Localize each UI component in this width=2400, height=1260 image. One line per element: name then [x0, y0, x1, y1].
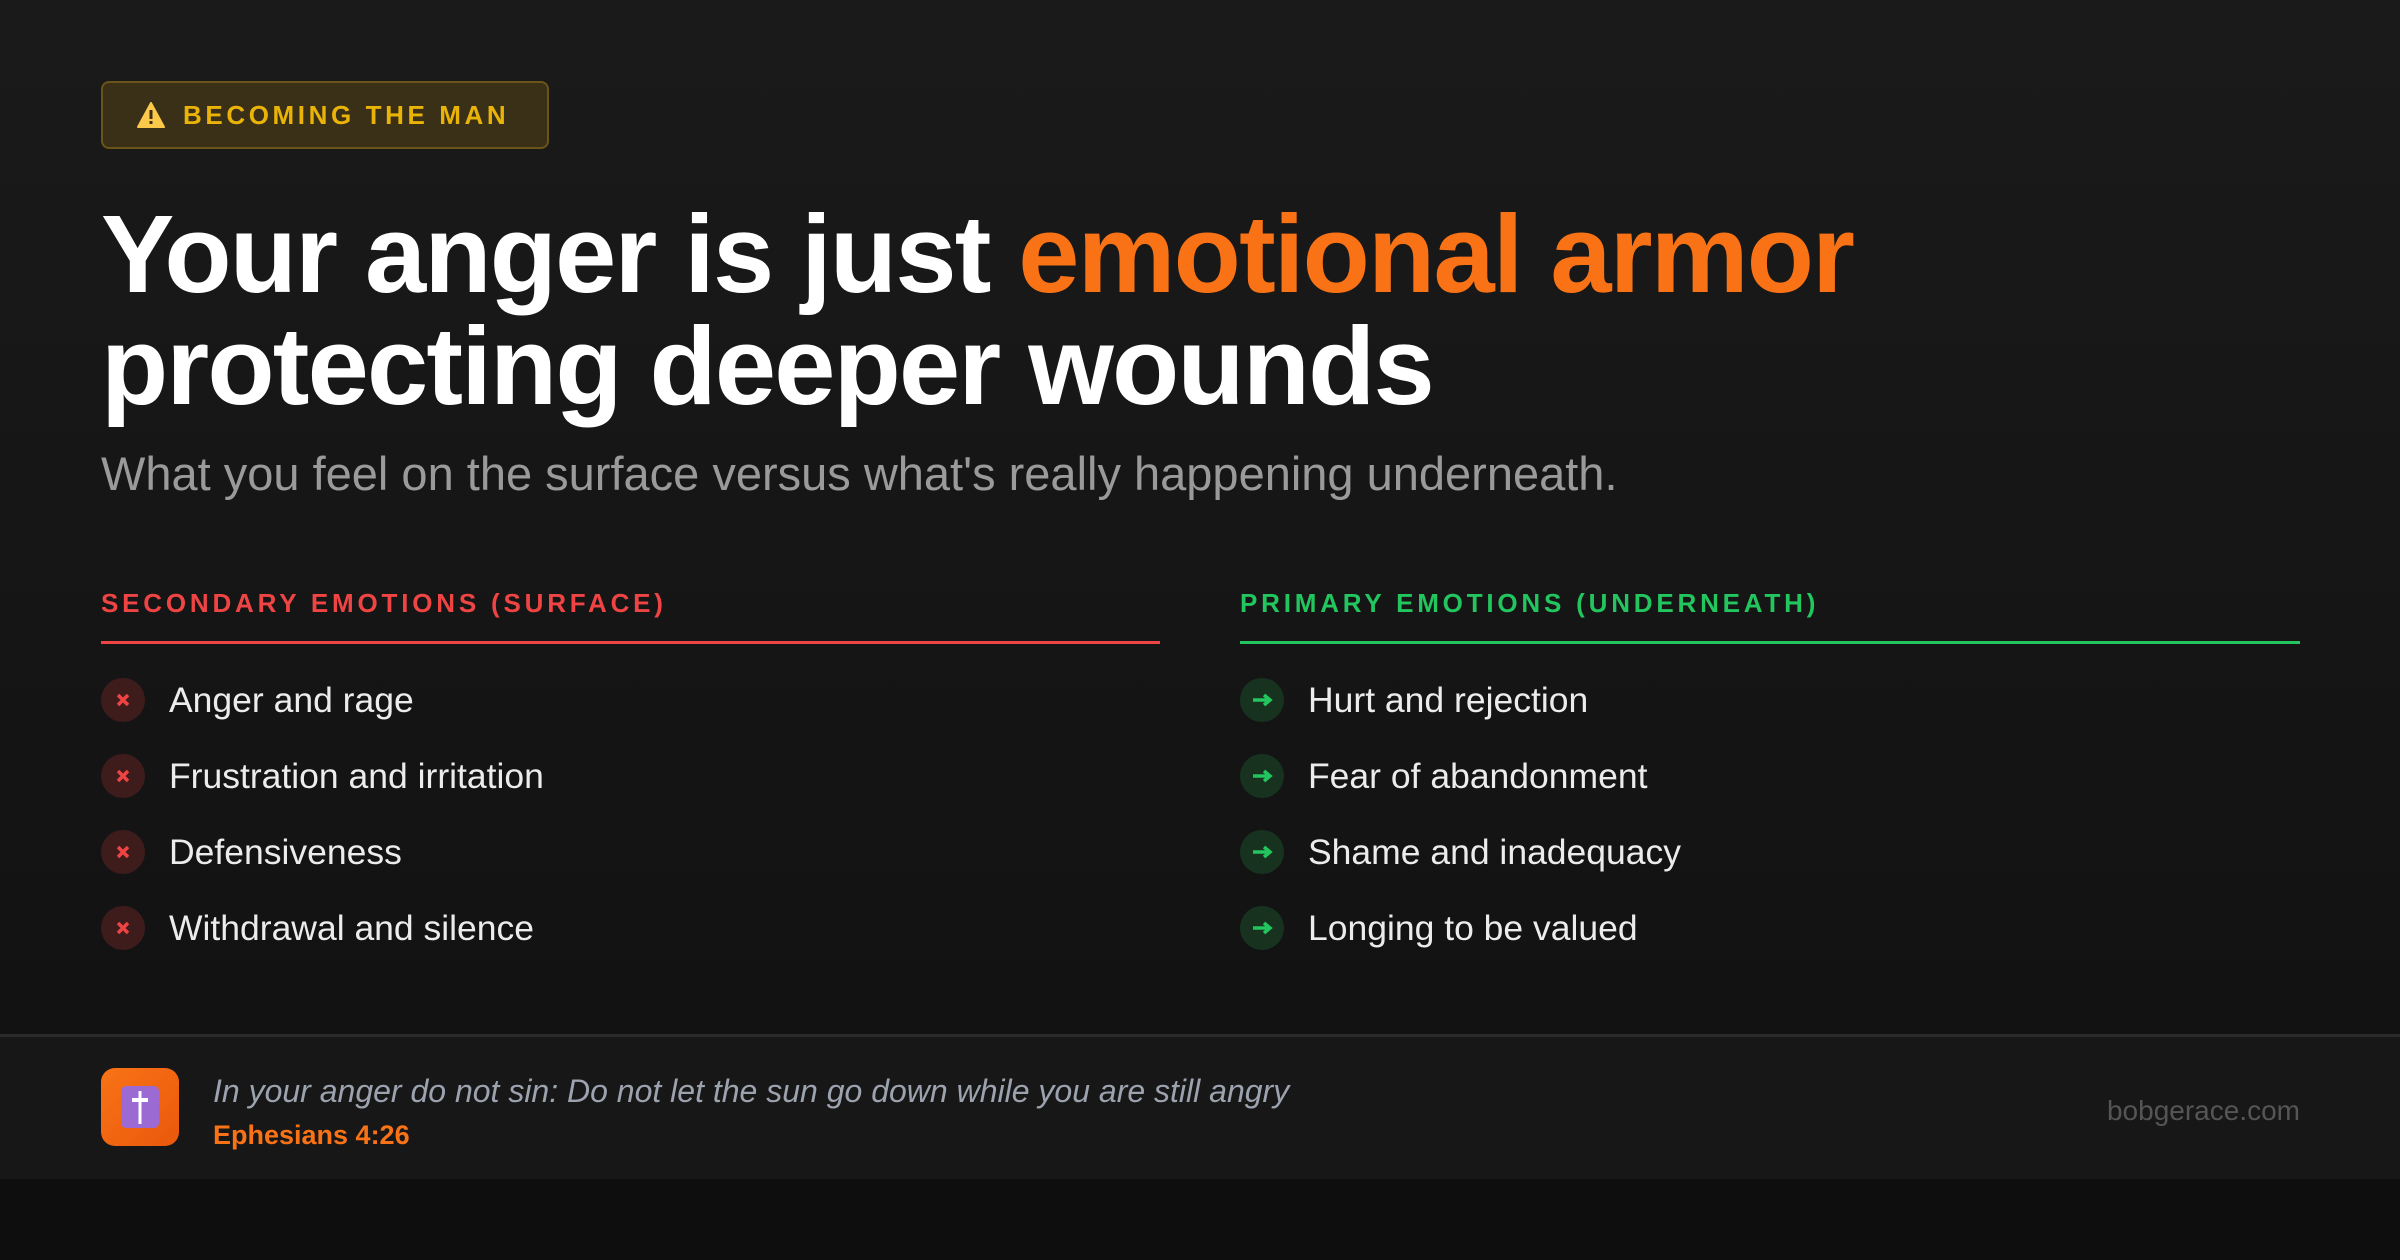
list: underlying emotions: Longing to be valued — [1308, 908, 1638, 948]
list: surface emotions — [101, 678, 544, 950]
list: underlying emotions: Hurt and rejection — [1308, 680, 1588, 720]
title — [101, 193, 1854, 428]
heading: secondary: SECONDARY EMOTIONS (SURFACE) — [101, 588, 667, 618]
heading: primary: PRIMARY EMOTIONS (UNDERNEATH) — [1240, 588, 1819, 618]
list: surface emotions: Frustration and irritation — [169, 756, 544, 796]
icon: cross — [101, 1068, 179, 1146]
title: protecting deeper wounds — [101, 305, 1433, 428]
list: surface emotions: Withdrawal and silence — [169, 908, 534, 948]
list: underlying emotions — [1240, 678, 1681, 950]
heading: secondary — [101, 584, 1160, 644]
badge: BECOMING THE MAN — [183, 100, 509, 130]
site url: bobgerace.com — [2107, 1095, 2300, 1126]
list: underlying emotions: Shame and inadequacy — [1308, 832, 1681, 872]
list: surface emotions: Defensiveness — [169, 832, 402, 872]
list: underlying emotions: Fear of abandonment — [1308, 756, 1647, 796]
badge — [101, 81, 549, 149]
panel: secondary emotions — [101, 588, 1160, 950]
footer — [0, 1034, 2400, 1179]
title: Your anger is just emotional armor — [101, 193, 1853, 316]
quote: In your anger do not sin: Do not let the sun go down while you are still angry — [213, 1073, 1289, 1109]
reference: Ephesians 4:26 — [213, 1120, 410, 1150]
subtitle: What you feel on the surface versus what's really happening underneath. — [101, 447, 1618, 500]
list: surface emotions: Anger and rage — [169, 680, 414, 720]
panel: primary emotions — [1240, 588, 2300, 950]
heading: primary — [1240, 584, 2300, 644]
